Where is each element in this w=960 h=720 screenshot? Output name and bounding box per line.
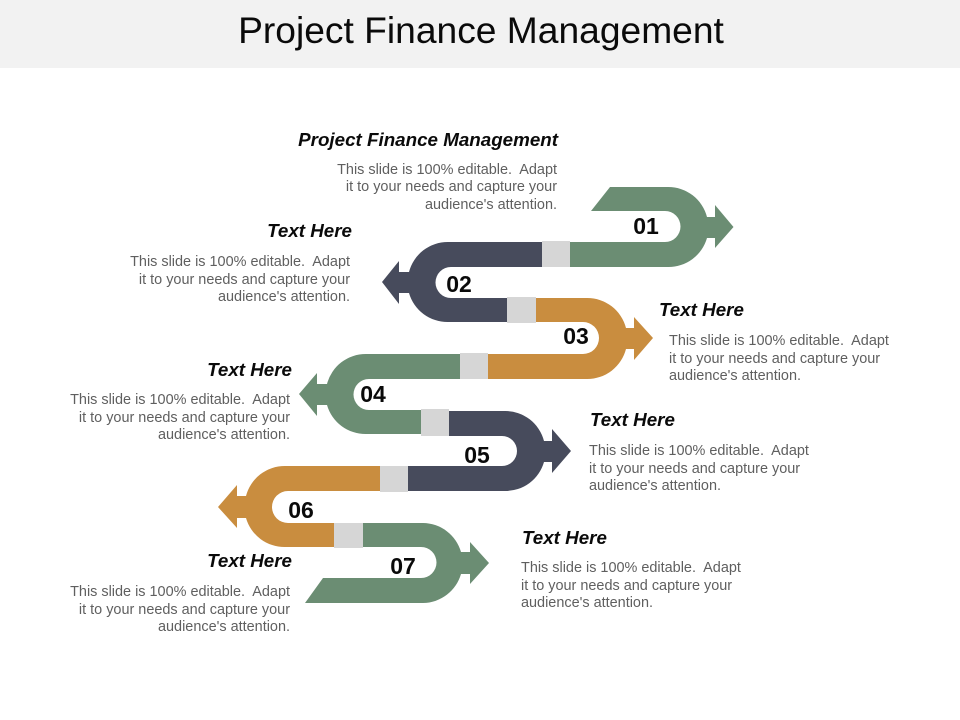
text block: 05: [589, 409, 809, 494]
text block: 04: it to your needs and capture your: [79, 410, 290, 426]
text block: 06: audience's attention.: [158, 619, 290, 635]
text block: 02: This slide is 100% editable. Adapt: [130, 254, 350, 270]
number 01: 01: [633, 213, 659, 239]
text block: 04: audience's attention.: [158, 427, 290, 443]
connector 6-7: [334, 523, 363, 548]
text block: 05: it to your needs and capture your: [589, 461, 800, 477]
number 04: 04: [360, 381, 386, 407]
text block: project finance management: Project Finance Management: [298, 129, 559, 150]
text block: 06: [70, 550, 292, 635]
number 07: 07: [390, 553, 416, 579]
text block: 02: [130, 220, 352, 305]
text block: 06: it to your needs and capture your: [79, 602, 290, 618]
title: Project Finance Management: [238, 9, 725, 51]
text block: 05: This slide is 100% editable. Adapt: [589, 443, 809, 459]
text block: 02: it to your needs and capture your: [139, 272, 350, 288]
text block: 07: This slide is 100% editable. Adapt: [521, 560, 741, 576]
text block: 05: Text Here: [590, 409, 675, 430]
arrow 07: [305, 523, 489, 603]
text block: project finance management: [298, 129, 559, 213]
text block: 03: This slide is 100% editable. Adapt: [669, 333, 889, 349]
arrow 06: [218, 466, 380, 547]
text block: 07: audience's attention.: [521, 595, 653, 611]
text block: 06: Text Here: [207, 550, 292, 571]
arrow 03: [488, 298, 653, 379]
text block: 04: [70, 359, 292, 443]
number 06: 06: [288, 497, 314, 523]
text block: 07: Text Here: [522, 527, 607, 548]
text block: project finance management: it to your needs and capture your: [346, 179, 557, 195]
text block: 06: This slide is 100% editable. Adapt: [70, 584, 290, 600]
number 05: 05: [464, 442, 490, 468]
text block: 03: Text Here: [659, 299, 744, 320]
connector 3-4: [460, 353, 488, 379]
connector 4-5: [421, 409, 449, 436]
text block: 03: audience's attention.: [669, 368, 801, 384]
text block: 05: audience's attention.: [589, 478, 721, 494]
text block: 07: [521, 527, 741, 611]
text block: 04: This slide is 100% editable. Adapt: [70, 392, 290, 408]
arrow 02: [382, 242, 542, 322]
arrow 04: [299, 354, 460, 434]
text block: project finance management: audience's attention.: [425, 197, 557, 213]
number 02: 02: [446, 271, 472, 297]
connector 2-3: [507, 297, 536, 323]
text block: 03: [659, 299, 889, 384]
number 03: 03: [563, 323, 589, 349]
connector 1-2: [542, 241, 570, 267]
text block: 02: Text Here: [267, 220, 352, 241]
text block: 04: Text Here: [207, 359, 292, 380]
arrow 05: [408, 411, 571, 491]
text block: 07: it to your needs and capture your: [521, 578, 732, 594]
header band: [0, 0, 960, 68]
text block: 03: it to your needs and capture your: [669, 351, 880, 367]
text block: 02: audience's attention.: [218, 289, 350, 305]
connector 5-6: [380, 466, 408, 492]
text block: project finance management: This slide is 100% editable. Adapt: [337, 162, 557, 178]
arrow 01: [570, 187, 734, 267]
